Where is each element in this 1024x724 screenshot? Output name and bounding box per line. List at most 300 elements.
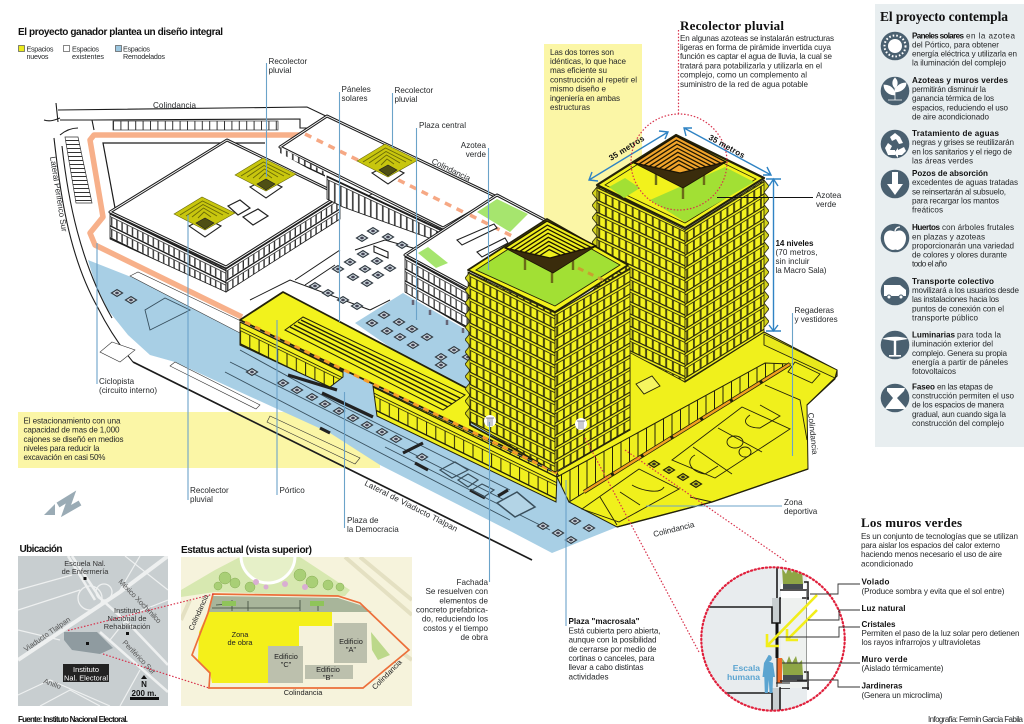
label: 14 niveles: (70 metros, (776, 248, 818, 257)
item: tratamiento de aguas (881, 129, 1014, 166)
note text: parking: El estacionamiento con una (24, 416, 121, 426)
item: luminarias: iluminación exterior del (912, 340, 993, 349)
label: volado: (Produce sombra y evita que el sol entre) (862, 587, 1005, 596)
note text: parking: cajones se diseñó en medios (24, 435, 124, 444)
label: colindancia bottom: Colindancia (652, 520, 696, 539)
text: recolector pluvial: complejo, como un complemento al (680, 71, 807, 80)
orange insulation (777, 658, 782, 683)
item: pozos de absorcion: para recargar los mantos (912, 196, 999, 205)
text: fachada: Fachada (456, 578, 488, 587)
roof A (110, 140, 340, 267)
map label: instituto rehabilitacion: Nacional de (107, 614, 147, 623)
panel background (875, 4, 1024, 447)
width arrow left (589, 131, 668, 181)
item: luminarias: para toda la (957, 330, 1001, 340)
orange base line (584, 364, 790, 492)
label: ciclopista: (circuito interno) (99, 386, 157, 395)
note text: twin towers: ingeniería en ambas (550, 94, 620, 103)
item: pozos de absorcion (881, 169, 1018, 214)
note text: twin towers: idénticas, lo que hace (550, 57, 626, 66)
roof inner line (605, 140, 756, 223)
label: edificio A: Edificio (339, 637, 363, 646)
wing facade right (373, 386, 557, 502)
scale and north: N (141, 680, 147, 689)
map point (84, 577, 86, 580)
road details inside note (267, 416, 360, 464)
label: jardineras: Jardineras (862, 682, 903, 690)
label: escala humana: humana (727, 672, 760, 682)
panel: el proyecto contempla (875, 4, 1024, 447)
item: huertos: proporcionarán una variedad (912, 242, 1014, 250)
orange dashes on roof C (470, 215, 520, 240)
label: edificio B: "B" (323, 673, 333, 682)
tower 2 (back) (592, 135, 769, 382)
heading: ubicacion: Ubicación (20, 544, 62, 555)
source: Fuente: Instituto Nacional Electoral. (18, 715, 128, 724)
item: faseo: Faseo (912, 382, 935, 392)
platform dark edge (617, 469, 808, 527)
icon: down arrow (881, 170, 909, 198)
plaza lines (250, 240, 420, 310)
label: volado: Volado (862, 578, 890, 586)
white building B (280, 116, 520, 243)
text: los muros verdes: acondicionado (861, 559, 913, 568)
label: cristales: Cristales (862, 620, 896, 629)
viaduct road line (133, 362, 532, 560)
item: transporte colectivo: las instalaciones hacia los (912, 295, 999, 304)
legend: new spaces: Espacios (26, 44, 54, 54)
item: huertos: todo el año (912, 260, 947, 269)
note text: parking: niveles para reducir la (24, 444, 100, 453)
note text: twin towers: mas eficiente su (550, 66, 607, 75)
left serrations (465, 272, 470, 420)
collector 2 (235, 158, 296, 198)
map point (126, 632, 129, 635)
item: luminarias: complejo. Genera su propia (912, 349, 1007, 358)
label: recolector pluvial 2: pluvial (394, 95, 418, 104)
text: los muros verdes: Es un conjunto de tecnologías que se utilizan (861, 532, 1018, 541)
columns (413, 300, 463, 333)
note text: twin towers: Las dos torres son (550, 48, 614, 57)
item: faseo (881, 382, 1014, 428)
legend: existing spaces: Espacios (72, 44, 99, 54)
item: faseo: construcción del complejo (912, 419, 1004, 428)
text: plaza macrosala: Plaza "macrosala" (568, 617, 640, 626)
planter bottom (783, 675, 803, 680)
item: paneles solares: Paneles solares (912, 32, 964, 40)
pyramid underside (634, 162, 726, 188)
icon: hourglass (881, 384, 909, 412)
label: 14 niveles: la Macro Sala) (776, 266, 827, 275)
upper garden strip (208, 596, 372, 612)
facade panel (781, 598, 807, 688)
site polygon (64, 632, 113, 654)
item: luminarias: fotovoltaicos (912, 367, 956, 376)
lower slab box (772, 688, 780, 715)
human scale figure (762, 655, 775, 693)
note text: twin towers: mismo diseño e (550, 85, 606, 94)
court lines (582, 385, 807, 525)
label: jardineras: (Genera un microclima) (862, 691, 943, 700)
item: faseo: gradual, aun cuando siga la (912, 410, 1006, 419)
left face (468, 272, 555, 472)
black leader: green roof (717, 196, 813, 198)
item: azoteas y muros verdes: Azoteas y muros verdes (912, 76, 1008, 85)
text: los muros verdes (861, 515, 1018, 568)
item: transporte colectivo: movilizará a los usuarios desde (912, 286, 1019, 295)
label: recolector pluvial 2: Recolector (394, 86, 433, 95)
label: edificio B: Edificio (316, 665, 340, 674)
planters in sports zone (648, 461, 660, 467)
text: recolector pluvial: función es captar el agua de lluvia, la cual se (680, 52, 832, 61)
item: tratamiento de aguas: Tratamiento de aguas (912, 129, 999, 138)
note text: parking: excavación en casi 50% (24, 453, 106, 462)
icon: sun (881, 32, 909, 60)
dotted magnifier circle on tower roof (631, 30, 727, 210)
section clipped content (700, 565, 817, 715)
label: edificio C: Edificio (274, 652, 298, 661)
label: paneles solares: solares (342, 94, 368, 103)
label: muro verde: (Aislado térmicamente) (862, 664, 944, 673)
right face (685, 180, 764, 382)
label: colindancia left: Colindancia (187, 592, 211, 632)
item: huertos: Huertos (912, 223, 940, 232)
upper slab box (772, 598, 780, 623)
left facade A (110, 214, 226, 292)
item: tratamiento de aguas: negras y grises se reutilizarán (912, 138, 1014, 147)
label: recolector pluvial 3: pluvial (190, 495, 213, 504)
showers roof (764, 334, 837, 378)
legs (656, 168, 704, 199)
plan labels (187, 592, 404, 697)
facade detail markers (484, 415, 587, 430)
label: volado (862, 578, 1005, 596)
label: zona deportiva: deportiva (784, 507, 818, 516)
planters on blue lane (112, 290, 594, 543)
label: regaderas y vestidores: Regaderas (794, 306, 834, 315)
orange bike dashes (305, 134, 520, 240)
item: faseo: de los espacios de manera (912, 401, 1004, 410)
width arrow right (684, 128, 771, 175)
white building C (405, 195, 560, 333)
item: azoteas y muros verdes: de aire acondicionado (912, 112, 989, 122)
legend: remodeled spaces (116, 44, 165, 61)
black label box (63, 664, 109, 682)
scale and north (130, 675, 159, 700)
small garden (371, 632, 390, 660)
label: colindancia right: Colindancia (806, 412, 819, 455)
lower connector facade (280, 147, 325, 178)
label: escala humana: Escala (733, 663, 760, 673)
text: fachada: concreto prefabrica- (416, 606, 488, 615)
black label box: Nal. Electoral (64, 674, 108, 682)
blue lane lines (145, 298, 550, 530)
text: plaza macrosala: Está cubierta pero abierta, (568, 626, 660, 636)
left serrations (592, 187, 597, 334)
label: 14 niveles: sin incluir (776, 257, 810, 266)
label: zona de obra: Zona (232, 630, 248, 639)
roof A double line (110, 140, 340, 267)
item: transporte colectivo (881, 277, 1019, 322)
legend: existing spaces: existentes (72, 52, 104, 61)
item: huertos (881, 223, 1014, 269)
heading: estatus actual: Estatus actual (vista superior) (181, 545, 312, 556)
label: zona deportiva: Zona (784, 498, 802, 507)
roof B double line (280, 116, 497, 228)
item: huertos: de colores y olores durante (912, 251, 1007, 260)
map label: periferico: Periférico Sur (121, 638, 158, 676)
label: lateral periferico sur: Lateral Periférico Sur (48, 156, 69, 233)
site area (384, 638, 405, 655)
collector 1 (174, 197, 235, 237)
orange dashes (245, 322, 557, 473)
label: plaza central: Plaza central (419, 121, 466, 130)
wing facade left (240, 322, 343, 387)
zona de obra (198, 612, 332, 683)
pyramid rain collectors on white buildings (174, 144, 418, 237)
map label: escuela: Escuela Nal. (64, 559, 106, 568)
map background (18, 556, 168, 706)
skylights (228, 200, 268, 225)
label: 14 niveles (776, 239, 827, 275)
label: cristales: los rayos infrarrojos y ultravioletas (862, 638, 980, 647)
text: recolector pluvial: En algunas azoteas se instalarán estructuras (680, 34, 834, 43)
text: fachada: de obra (461, 633, 488, 642)
item: azoteas y muros verdes (881, 76, 1008, 122)
item: azoteas y muros verdes: ganancia térmica de los (912, 94, 994, 103)
text: fachada: costos y el tiempo (423, 624, 488, 633)
label: colindancia bottom: Colindancia (284, 688, 323, 697)
map label: escuela: de Enfermería (62, 567, 109, 576)
left face (597, 186, 685, 382)
detail circle: green wall section (700, 565, 860, 715)
item: pozos de absorcion: Pozos de absorción (912, 169, 988, 178)
text: plaza macrosala: llevar a cabo distintas (568, 663, 644, 672)
text: fachada (416, 578, 488, 642)
map label: instituto rehabilitacion: Instituto (114, 606, 140, 615)
blue leader lines (97, 63, 792, 626)
yellow note background: twin towers (544, 44, 642, 244)
label: paneles solares: Páneles (342, 85, 371, 94)
label: portico: Pórtico (280, 486, 305, 495)
pink trees (253, 579, 308, 590)
text: recolector pluvial: Recolector pluvial (680, 18, 784, 33)
icon: lamp (881, 331, 909, 359)
text: plaza macrosala (568, 617, 660, 681)
site marker (86, 642, 89, 645)
sports zone and yellow base (557, 332, 837, 527)
label: azotea verde: Azotea (461, 141, 486, 150)
text: recolector pluvial (680, 18, 834, 89)
label: lateral de viaducto tlalpan: Lateral de Viaducto Tlalpan (363, 479, 459, 534)
roof C (405, 195, 560, 290)
planters on plaza (310, 228, 474, 368)
roof structures (457, 224, 508, 257)
item: paneles solares: energía eléctrica y utilizarla en (912, 50, 1017, 59)
text: plaza macrosala: cortinas o canceles, para (568, 654, 655, 663)
map label: xochimilco: México Xochimilco (117, 577, 163, 625)
facade B (327, 176, 443, 243)
green park (181, 557, 350, 597)
icon: leaf (881, 77, 909, 105)
legend: new spaces (18, 44, 54, 61)
map roads (18, 556, 168, 706)
item: paneles solares: en la azotea (966, 32, 1015, 40)
label: jardineras (862, 682, 943, 700)
legend: new spaces: nuevos (26, 52, 49, 61)
legs (525, 250, 573, 283)
item: luminarias: energía a partir de páneles (912, 358, 1008, 367)
title: El proyecto ganador plantea un diseño integral (18, 27, 223, 38)
legend: existing spaces (64, 44, 104, 61)
item: tratamiento de aguas: en los sanitarios y el riego de (912, 147, 1012, 156)
item: pozos de absorcion: se reinsertarán al subsuelo, (912, 187, 1006, 196)
plan background (181, 557, 412, 706)
label: azotea verde tower: verde (816, 200, 837, 209)
label: azotea verde tower: Azotea (816, 191, 841, 200)
glass line (806, 590, 808, 680)
dotted circle outline (701, 567, 845, 711)
item: transporte colectivo: Transporte colectivo (912, 277, 994, 286)
note text: twin towers: construcción al repetir el (550, 75, 637, 84)
label: 35 metros right: 35 metros (707, 133, 747, 160)
scale and north: 200 m. (132, 689, 156, 698)
facade C (405, 256, 470, 330)
right facade A (226, 197, 340, 292)
label: colindancia diagonal: Colindancia (430, 157, 472, 183)
yellow low building (240, 292, 557, 502)
text: recolector pluvial: suministro de la red de agua potable (680, 80, 808, 89)
item: huertos: en plazas y azoteas (912, 232, 985, 241)
item: huertos: con árboles frutales (942, 223, 1014, 232)
item: pozos de absorcion: excedentes de aguas tratadas (912, 178, 1018, 187)
trees (214, 569, 344, 592)
blue remodeled ground (88, 260, 617, 553)
label: plaza de la democracia: Plaza de (347, 516, 378, 525)
label: luz natural: Luz natural (862, 604, 906, 613)
text: plaza macrosala: actividades (568, 672, 608, 681)
item: azoteas y muros verdes: permitirán disminuir la (912, 85, 986, 94)
note text: twin towers: estructuras (550, 103, 590, 112)
item: transporte colectivo: transporte público (912, 313, 978, 322)
panel heading: El proyecto contempla (880, 9, 1008, 24)
roof (597, 135, 764, 228)
icon: van (881, 277, 909, 305)
label: recolector pluvial 3: Recolector (190, 486, 229, 495)
text: recolector pluvial: tratará para potabilizarla y utilizarla en el (680, 61, 822, 70)
label: ciclopista: Ciclopista (99, 377, 134, 386)
label: edificio C: "C" (281, 660, 292, 669)
green patches (609, 167, 754, 222)
label: 14 niveles: 14 niveles (776, 239, 814, 248)
location map (18, 556, 168, 706)
label: edificio A: "A" (346, 645, 356, 654)
park circle (240, 557, 296, 584)
leader lines (778, 584, 860, 687)
roof B (280, 116, 497, 228)
north arrow icon (44, 497, 80, 515)
label: muro verde (862, 655, 944, 673)
roof rim (468, 219, 628, 312)
small box (636, 376, 660, 394)
label: recolector pluvial 1: Recolector (268, 57, 307, 66)
pyramid top (634, 136, 726, 173)
interior background (700, 565, 807, 715)
base platform (557, 332, 837, 527)
site plan: ground, roads and boundaries (44, 103, 617, 560)
black label box: Instituto (73, 665, 99, 674)
item: transporte colectivo: puntos de conexión con el (912, 304, 1004, 313)
map label: instituto rehabilitacion: Rehabilitación (104, 622, 150, 631)
text: los muros verdes: Los muros verdes (861, 515, 962, 530)
dotted lines map to plan (68, 594, 214, 688)
credit: Infografía: Fermín García Fabila (928, 715, 1024, 724)
wing roof (240, 292, 557, 472)
white building A (110, 140, 340, 292)
measurement arrows (589, 128, 781, 331)
text: recolector pluvial: ligeras en forma de pirámide invertida cuya (680, 43, 831, 52)
grey frame (497, 492, 535, 517)
edificio B (305, 665, 353, 679)
item: luminarias: Luminarias (912, 330, 955, 340)
item: pozos de absorcion: freáticos (912, 206, 943, 214)
wall (776, 623, 778, 658)
item: azoteas y muros verdes: espacios, reduciendo el uso (912, 103, 1008, 112)
item: faseo: construcción permiten el uso (912, 392, 1014, 401)
label: colindancia right: Colindancia (370, 657, 404, 691)
parking strip under bike path (130, 272, 243, 333)
note text: parking (24, 416, 124, 462)
yellow note background: parking (18, 412, 380, 468)
edificio C (268, 646, 303, 683)
right serrations (764, 180, 769, 327)
icon: recycle (881, 130, 909, 158)
roof green (476, 224, 620, 306)
court circle (727, 436, 743, 448)
white marker right (575, 418, 587, 430)
roof dashes (578, 268, 605, 281)
plant bottom (782, 656, 803, 675)
roof ribs (285, 317, 465, 410)
text: fachada: elementos de (439, 596, 488, 605)
road stripes (181, 557, 412, 660)
height arrow (766, 179, 781, 331)
text: plaza macrosala: de cerrarse por medio de (568, 645, 657, 654)
pyramid chevrons (639, 140, 721, 171)
label: 35 metros left: 35 metros (607, 134, 646, 163)
text: los muros verdes: para aislar los espacios del calor externo (861, 541, 1000, 550)
sun arrow large (767, 595, 817, 646)
boundary lines (58, 107, 330, 130)
right face (555, 268, 630, 472)
note text: parking: capacidad de mas de 1,000 (24, 426, 120, 435)
legend: remodeled spaces: Remodelados (123, 52, 165, 61)
satellite plan (181, 557, 412, 706)
sun arrow small (787, 610, 817, 640)
item: faseo: en las etapas de (937, 382, 993, 392)
label: zona de obra: de obra (227, 638, 253, 647)
legend (18, 44, 165, 61)
plant top (782, 566, 803, 584)
green roof patches (418, 199, 528, 268)
edificio A (334, 623, 367, 663)
lower slab lines (720, 688, 790, 715)
dotted zoom lines (585, 438, 787, 652)
text: los muros verdes: haciendo menos necesario el uso de aire (861, 550, 1002, 559)
label: azotea verde: verde (466, 150, 486, 159)
upper slab lines (700, 565, 790, 623)
label: cristales: Permiten el paso de la luz solar pero detienen (862, 629, 1020, 638)
